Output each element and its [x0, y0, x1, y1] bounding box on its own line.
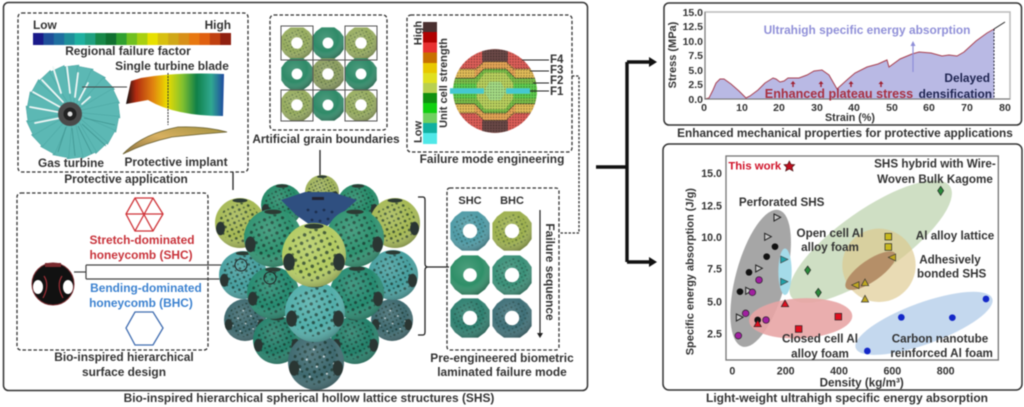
y axis ticks: 15.0: [683, 7, 703, 19]
arrows: plateau stress: [790, 81, 884, 87]
y ticks: 5.0: [707, 296, 722, 308]
label: unit cell strength: Unit cell strength: [438, 38, 450, 128]
markers: black circles: [737, 243, 778, 323]
labels: material classes: Adhesively: [919, 254, 981, 267]
x ticks: 600: [883, 366, 901, 378]
label: low: Low: [33, 18, 58, 32]
labels: failure levels: F4: [550, 54, 564, 66]
chart: scatter plot: [684, 156, 999, 389]
region: perforated SHS: [730, 209, 792, 348]
y ticks: 10.0: [701, 232, 722, 244]
label: high: High: [205, 18, 231, 32]
label: single turbine blade: Single turbine blade: [115, 59, 229, 73]
label: SHC: SHC: [458, 195, 482, 207]
y axis ticks: 7.5: [688, 50, 703, 62]
icon: bending-dominated honeycomb: [126, 312, 163, 345]
caption: mechanical properties: Enhanced mechanical properties for protective applications: [677, 126, 1013, 140]
icon: stretch-dominated honeycomb: [126, 198, 163, 231]
panel: energy absorption scatter chart: [663, 144, 1022, 390]
y ticks: 15.0: [701, 168, 722, 180]
markers: olive triangles: [852, 254, 896, 302]
x ticks: 200: [777, 366, 795, 378]
panel: bio-inspired surface design: [17, 193, 264, 350]
arrow: bracket to right panels: [596, 57, 657, 267]
icon: section line: [167, 73, 169, 125]
caption: light-weight absorption: Light-weight ultrahigh specific energy absorption: [706, 391, 988, 405]
chart: stress strain curve: [705, 12, 1010, 99]
markers: open triangles: [736, 214, 781, 321]
label: gas turbine: Gas turbine: [38, 156, 104, 170]
label: stretch-dominated: Stretch-dominated: [89, 233, 195, 247]
markers: blue circles: [864, 296, 989, 354]
annotation: ultrahigh energy absorption: Ultrahigh specific energy absorption: [764, 23, 970, 37]
region: small cyan: [778, 248, 792, 295]
chart: failure map: [450, 49, 537, 133]
markers: green diamonds: [805, 186, 944, 297]
annotation: enhanced plateau stress: Enhanced plateau stress: [765, 87, 913, 101]
heading: protective application: Protective application: [64, 172, 188, 186]
region: open cell foam: [789, 180, 952, 300]
x axis ticks: 70: [961, 102, 973, 114]
x ticks: 800: [937, 366, 955, 378]
icon: black sphere: [32, 263, 74, 305]
panel: protective application: [18, 13, 248, 172]
y axis ticks: 2.5: [688, 79, 703, 91]
arrow: failure sequence: [537, 210, 543, 338]
arrow: protective application to lattice: [232, 172, 234, 190]
y axis title: Stress (MPa): [667, 21, 679, 88]
y ticks: 7.5: [707, 264, 722, 276]
x axis ticks: 60: [923, 102, 935, 114]
annotation: delayed densification: Delayed: [944, 71, 990, 85]
labels: material classes: [739, 158, 996, 361]
labels: failure levels: F1: [550, 86, 564, 98]
x axis ticks: 30: [811, 102, 823, 114]
label: BHC: honeycomb (BHC): [89, 296, 193, 310]
y axis ticks: 5.0: [688, 65, 703, 77]
color bar: unit cell strength: [423, 22, 437, 144]
y ticks: [701, 168, 722, 341]
icon: protective implant: [123, 127, 227, 154]
y axis ticks: 0.0: [688, 94, 703, 106]
x axis ticks: 0: [701, 102, 707, 114]
labels: material classes: Woven Bulk Kagome: [877, 173, 993, 186]
icon: leader line from turbine to blade: [82, 86, 127, 88]
heading: bio-inspired surface design: Bio-inspired hierarchical: [54, 350, 194, 364]
caption: left panel: Bio-inspired hierarchical spherical hollow lattice structures (SHS): [124, 391, 494, 405]
label: low strength: Low: [412, 121, 424, 143]
navy sphere: [281, 192, 357, 232]
labels: material classes: Carbon nanotube: [892, 333, 989, 346]
lattice: SHS cube of spheres: [215, 175, 420, 390]
leader lines to lattice: [74, 265, 264, 279]
y axis ticks: 12.5: [683, 21, 703, 33]
color bar: regional failure factor: [33, 33, 231, 45]
arrow: energy absorption: [910, 41, 916, 72]
y axis ticks: [683, 7, 703, 106]
markers: yellow squares: [885, 233, 892, 250]
heading: laminated failure mode: laminated failure mode: [437, 365, 567, 379]
x axis ticks: 20: [773, 102, 785, 114]
labels: material classes: bonded SHS: [917, 268, 987, 281]
label: regional failure factor: Regional failure factor: [65, 44, 191, 58]
x axis title: Density (kg/m³): [820, 376, 904, 389]
labels: material classes: Closed cell Al: [782, 333, 858, 346]
heading: failure mode engineering: Failure mode engineering: [420, 152, 564, 166]
icon: turbine blade colour map: [126, 74, 224, 116]
x axis ticks: [701, 102, 1011, 114]
region: adhesively bonded: [844, 250, 896, 290]
annotation: delayed densification: [919, 71, 992, 101]
markers: purple circles: [735, 277, 769, 339]
annotation: delayed densification: densification: [919, 87, 992, 101]
labels: material classes: SHS hybrid with Wire-: [874, 158, 996, 171]
heading: laminated failure mode: [430, 351, 574, 379]
region: closed cell foam: [748, 296, 853, 341]
y ticks: 2.5: [707, 329, 722, 341]
panel: left main frame: [4, 2, 588, 390]
icon: gas turbine: [25, 64, 121, 160]
x ticks: 0: [729, 366, 735, 378]
panel: laminated failure mode: [447, 188, 559, 350]
label: BHC: BHC: [500, 195, 524, 207]
y axis ticks: 10.0: [683, 36, 703, 48]
x axis ticks: 10: [736, 102, 748, 114]
label: high strength: High: [412, 21, 424, 45]
x axis ticks: 80: [999, 102, 1011, 114]
arrow: lattice to grain boundaries: [319, 150, 321, 205]
region: al alloy lattice: [842, 229, 916, 302]
heading: laminated failure mode: Pre-engineered biometric: [430, 351, 574, 365]
labels: material classes: Al alloy lattice: [916, 230, 995, 243]
arrow: dotted link to failure sequence: [560, 76, 579, 233]
labels: material classes: Perforated SHS: [739, 196, 825, 209]
labels: material classes: alloy foam: [791, 348, 849, 361]
labels: failure levels: [522, 54, 564, 98]
markers: red triangles and squares: [754, 300, 842, 332]
panel: artificial grain boundaries: [270, 15, 387, 130]
x axis ticks: 40: [848, 102, 860, 114]
brace: lattice to laminated mode: [418, 197, 449, 335]
label: failure sequence: Failure sequence: [543, 223, 557, 321]
labels: material classes: alloy foam: [801, 241, 859, 254]
panel: failure mode engineering: [407, 15, 572, 152]
x axis ticks: 50: [886, 102, 898, 114]
heading: artificial grain boundaries: Artificial grain boundaries: [252, 132, 400, 146]
y ticks: 12.5: [701, 200, 722, 212]
x ticks: [729, 366, 955, 378]
y axis title: Specific energy absorption (J/g): [684, 188, 696, 355]
labels: failure levels: F2: [550, 75, 563, 87]
x axis title: Strain (%): [825, 112, 875, 124]
label: this work: This work: [728, 160, 782, 172]
label: SHC: honeycomb (SHC): [89, 248, 193, 262]
heading: bio-inspired surface design: surface design: [82, 365, 166, 379]
labels: failure levels: F3: [550, 64, 563, 76]
marker: this work star: [784, 161, 795, 171]
markers: cyan triangles: [781, 256, 788, 285]
heading: bio-inspired surface design: [54, 350, 194, 379]
labels: material classes: Open cell Al: [797, 227, 863, 240]
region: carbon nanotube foam: [855, 291, 993, 356]
label: bending-dominated: Bending-dominated: [90, 281, 202, 295]
labels: material classes: reinforced Al foam: [890, 347, 993, 360]
x ticks: 400: [830, 366, 848, 378]
label: protective implant: Protective implant: [124, 155, 228, 169]
panel: stress strain chart: [664, 3, 1022, 125]
